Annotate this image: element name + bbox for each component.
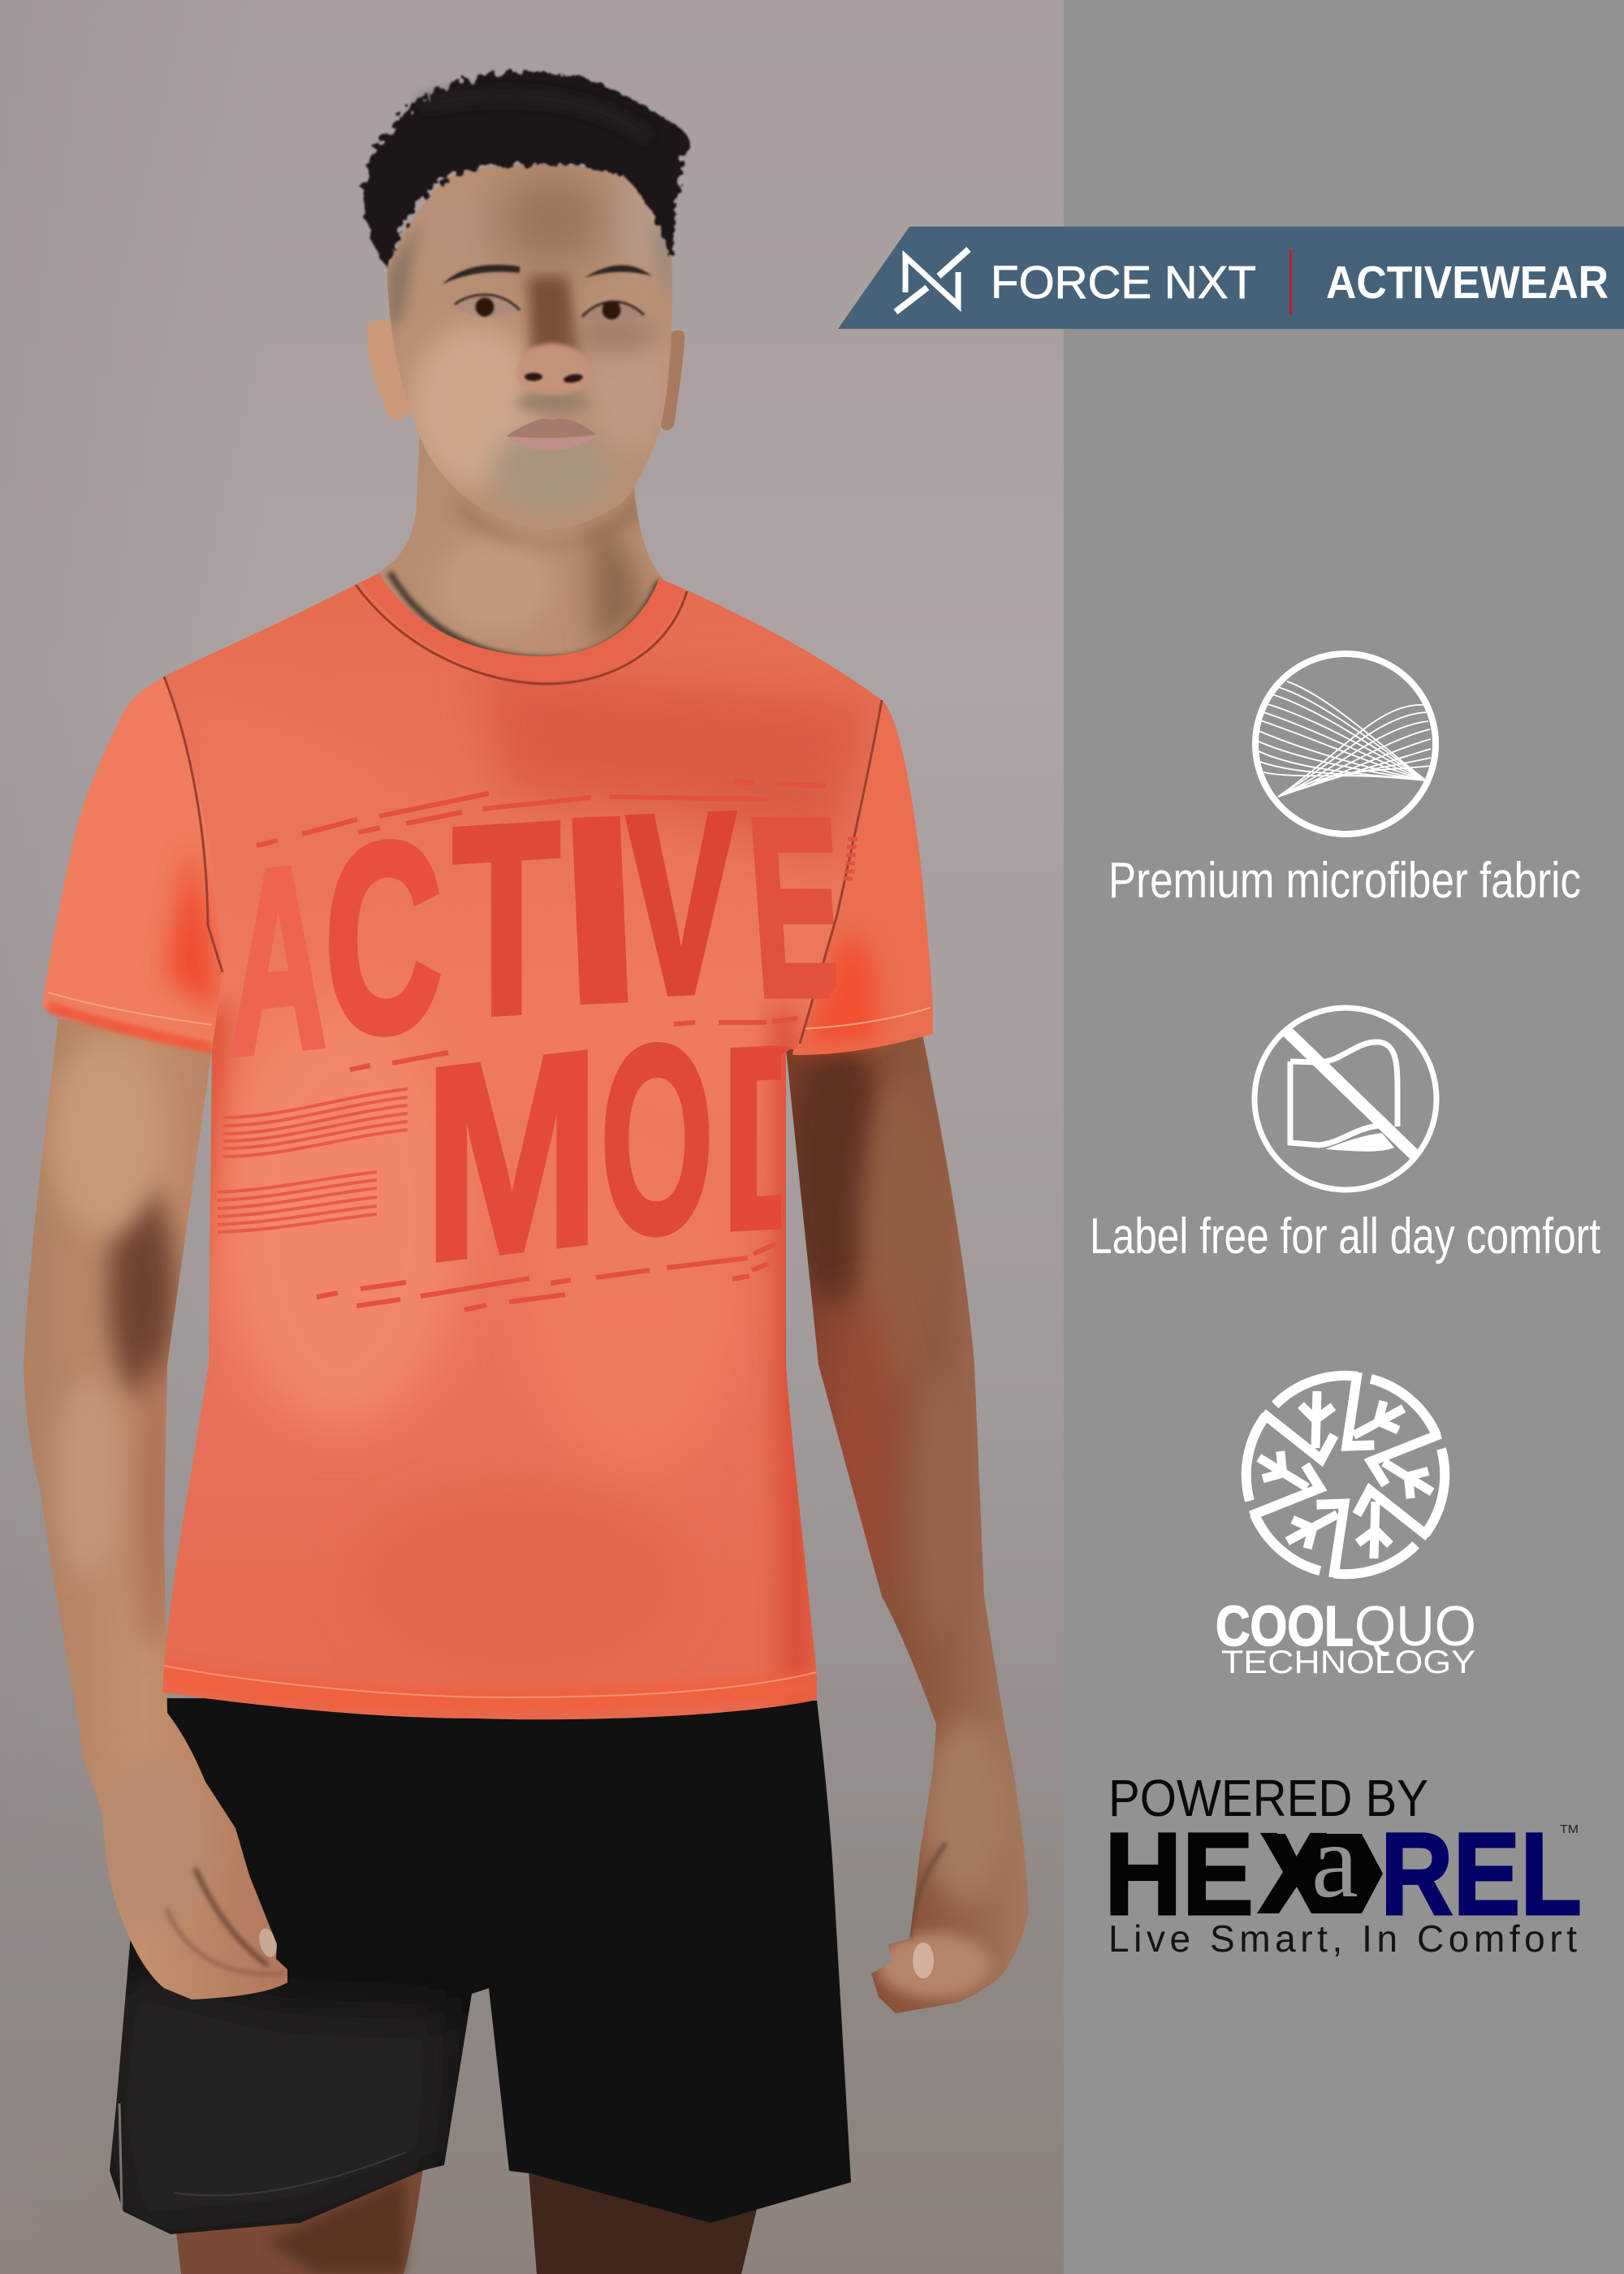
eyebrows <box>443 265 652 284</box>
coolquo technology logo text <box>1216 1594 1476 1680</box>
print word ACTIVE: E <box>741 767 853 1049</box>
icon: snowflake <box>1224 1347 1467 1602</box>
brand name: FORCE NXT <box>991 257 1256 309</box>
tagline: Live Smart, In Comfort <box>1108 1917 1577 1960</box>
left arm and hand <box>16 1007 300 2014</box>
coolquo technology logo text: QUO <box>1354 1594 1476 1658</box>
right arm and hand <box>780 1023 1039 2022</box>
trademark: TM <box>1560 1822 1579 1836</box>
print word ACTIVE: A <box>230 810 326 1110</box>
print speed dashes <box>257 781 826 1310</box>
icon: Force NXT logo <box>896 249 969 312</box>
nose <box>516 344 590 395</box>
shirt body <box>154 560 893 1730</box>
wordmark: REL <box>1380 1809 1582 1939</box>
print word MODE <box>435 1042 791 1263</box>
print stripes <box>218 1089 408 1232</box>
shirt print: ACTIVE MODE graphic <box>218 757 853 1321</box>
wordmark: a <box>1311 1803 1358 1920</box>
face <box>374 154 682 536</box>
print word MODE: O <box>600 988 714 1291</box>
print small side bars <box>844 839 857 879</box>
right grey panel <box>1064 0 1624 2274</box>
divider <box>1289 249 1292 314</box>
brand banner <box>838 227 1624 329</box>
wordmark <box>1104 1803 1582 1939</box>
left ear <box>367 320 412 420</box>
right ear <box>660 331 685 430</box>
powered by: POWERED BY <box>1108 1769 1428 1827</box>
print word ACTIVE: I <box>547 757 653 1063</box>
print word MODE: M <box>424 992 600 1321</box>
print word ACTIVE: C <box>325 784 442 1092</box>
powered by hexarel logo <box>1104 1769 1582 1960</box>
neck <box>376 435 663 656</box>
shorts <box>97 1689 861 2242</box>
print word ACTIVE <box>231 811 836 1057</box>
lips <box>506 419 597 451</box>
model photo illustration <box>16 71 1039 2274</box>
print word MODE: D <box>721 988 838 1285</box>
sleeve seams <box>164 677 882 1044</box>
curly hair <box>365 71 690 268</box>
legs <box>175 2160 757 2274</box>
icon: microfiber fabric <box>1255 654 1436 834</box>
print word ACTIVE: T <box>453 767 559 1073</box>
wordmark: X <box>1257 1808 1330 1939</box>
icon: no label <box>1255 1008 1436 1190</box>
wordmark: HE <box>1104 1809 1254 1939</box>
print word ACTIVE: V <box>627 759 736 1048</box>
hexagon mark with X <box>1257 1834 1383 1913</box>
coolquo technology logo text: COOL <box>1216 1594 1354 1658</box>
collar <box>361 573 684 681</box>
photo background <box>0 0 1065 2274</box>
eyes <box>455 295 644 322</box>
t-shirt <box>42 560 933 1730</box>
right sleeve <box>793 700 933 1055</box>
coolquo technology logo text: TECHNOLOGY <box>1221 1645 1475 1680</box>
left sleeve <box>42 677 222 1049</box>
